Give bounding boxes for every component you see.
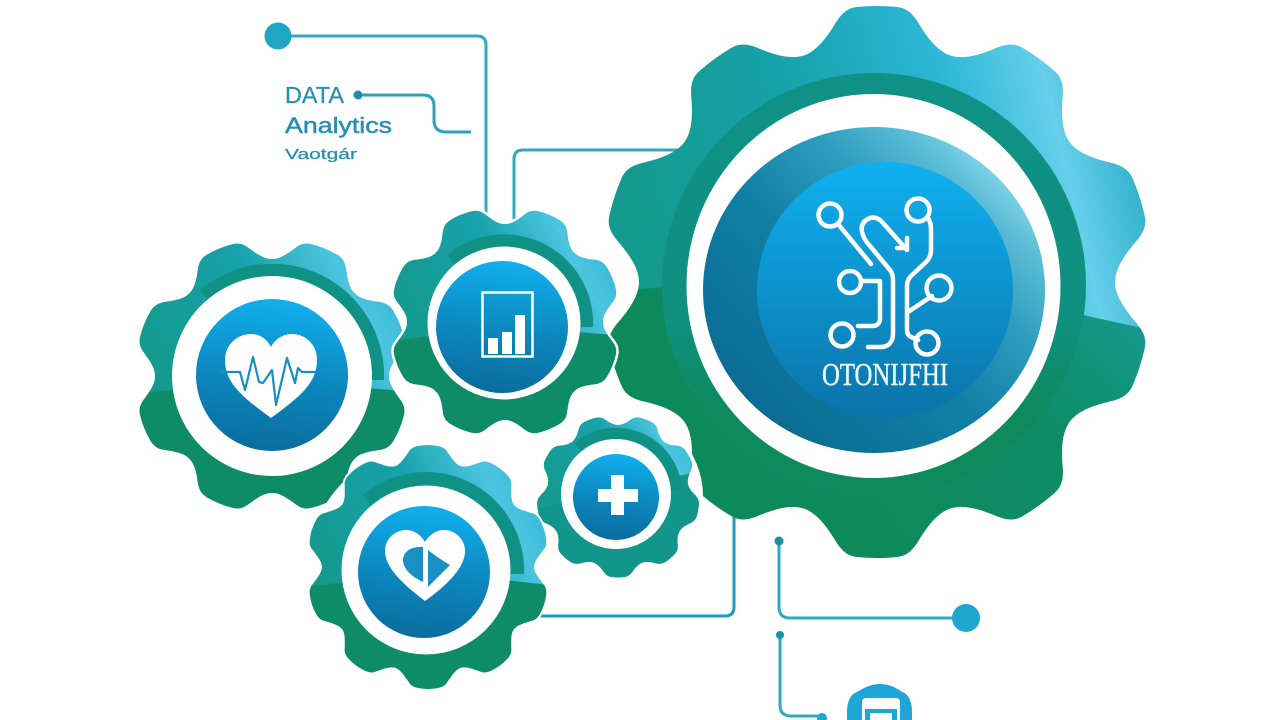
connector: small gear to large gear (514, 150, 685, 232)
gear body (394, 210, 616, 434)
icon: bar chart (482, 292, 532, 356)
gear: medical plus (537, 417, 699, 578)
gear body (305, 440, 550, 695)
white gap: around medical gear (533, 411, 703, 581)
icon: heart with pulse (220, 334, 318, 418)
label: data analytics: Analytics (285, 113, 392, 138)
connector: top node to small gear (264, 22, 486, 225)
gear body (140, 244, 404, 508)
white gap: around lower heart gear (308, 447, 548, 687)
connector: data label leader (354, 90, 471, 132)
icon: plus (598, 475, 638, 515)
label: data analytics: DATA (285, 82, 345, 108)
white ring (342, 486, 510, 654)
gear: heart monitor (140, 244, 404, 508)
blue disc (358, 506, 490, 638)
connector: lower right node (774, 536, 980, 632)
label: data analytics: Vaotgár (285, 146, 357, 163)
blue disc (436, 261, 568, 393)
white ring (172, 276, 372, 476)
gear body (590, 0, 1160, 570)
icon: split heart (385, 530, 465, 601)
gear: bar chart (391, 210, 619, 434)
infographic: healthcare data analytics gears (140, 6, 1146, 720)
gear band (574, 428, 682, 490)
blue disc (703, 127, 1045, 453)
gear band (363, 472, 524, 574)
white ring (686, 94, 1060, 478)
connector: bottom node to icon (776, 631, 827, 720)
icon: bottom document badge (847, 684, 912, 720)
blue disc (573, 454, 659, 540)
gear band (447, 234, 593, 327)
gear body (537, 417, 699, 578)
icon: circuit tree (818, 198, 952, 354)
inner disc (757, 162, 1013, 418)
connector: bottom gear to large gear (515, 515, 734, 616)
gear: heart (310, 445, 546, 689)
gear band (200, 264, 384, 380)
gear band (662, 73, 1086, 497)
label: data analytics (285, 82, 392, 163)
blue disc (196, 299, 348, 451)
white ring (561, 439, 671, 549)
icon caption: OTONIJFHI (822, 356, 948, 392)
white ring (428, 246, 580, 400)
gear: large analytics gear (590, 0, 1160, 570)
